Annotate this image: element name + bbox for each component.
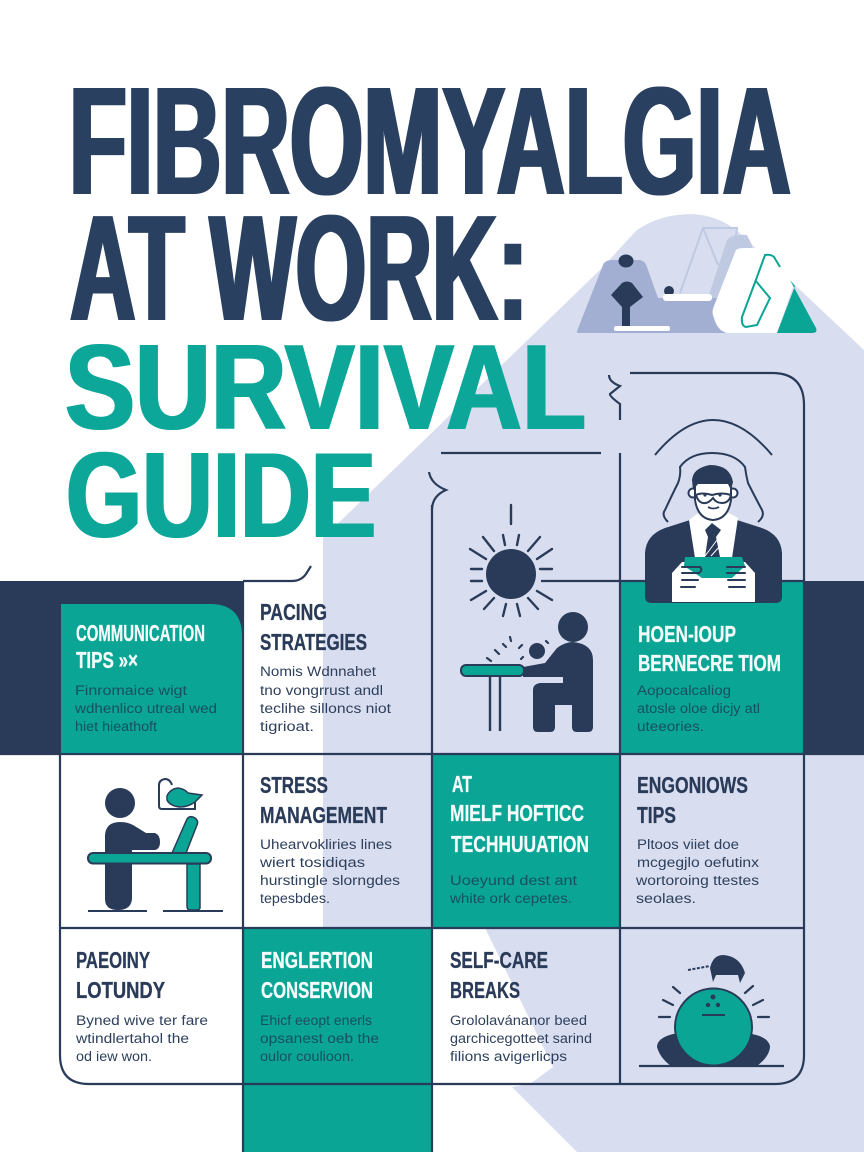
panel: communication tips: hiet hieathoft — [75, 719, 157, 735]
panel: energy conservation: opsanest oeb the — [260, 1031, 379, 1047]
panel: ergonomic tips: wortoroing ttestes — [635, 873, 759, 889]
icon: sun and person at desk — [461, 505, 593, 732]
navy band left — [0, 581, 243, 754]
panel: productivity — [75, 947, 208, 1065]
panel: pacing strategies: PACING — [260, 599, 327, 625]
panel: pacing strategies: STRATEGIES — [260, 629, 367, 655]
panel: communication tips — [61, 604, 242, 753]
grid lines — [0, 373, 864, 1152]
teal cell: homeroom — [621, 582, 804, 754]
panel: stress management: tepesbdes. — [260, 891, 330, 907]
panel: communication tips: TIPS »× — [76, 647, 138, 673]
panel: mindful techniques: white ork cepetes. — [449, 891, 572, 907]
panel: ergonomic tips: ENGONIOWS — [637, 772, 748, 798]
panel: self-care breaks: SELF-CARE — [450, 947, 548, 973]
panel: pacing strategies: tigrioat. — [260, 719, 314, 735]
lavender background shape — [323, 214, 864, 1152]
panel: energy conservation: CONSERVION — [261, 977, 373, 1003]
panel: homeroom text — [637, 621, 781, 735]
teal cell: energy conservation — [244, 928, 432, 1152]
panel: self-care breaks: garchicegotteet sarind — [450, 1031, 592, 1047]
panel: communication tips: wdhenlico utreal wed — [74, 701, 217, 717]
panel: self-care breaks: BREAKS — [450, 977, 520, 1003]
panel: stress management: STRESS — [260, 772, 328, 798]
panel: mindful techniques: TECHHUUATION — [451, 831, 589, 857]
teal cell: mindful techniques — [433, 755, 620, 927]
panel: mindful techniques: MIELF HOFTICC — [450, 800, 584, 826]
panel: ergonomic tips: Pltoos viiet doe — [637, 837, 739, 853]
panel: productivity: PAEOINY — [76, 947, 150, 973]
panel: productivity: wtindlertahol the — [75, 1031, 189, 1047]
icon: businessman with device — [645, 420, 782, 603]
panel: energy conservation: oulor coulioon. — [260, 1049, 354, 1065]
panel: communication tips: COMMUNICATION — [76, 620, 205, 646]
title — [65, 55, 791, 563]
panel: energy conservation: Ehicf eeopt enerls — [260, 1013, 372, 1029]
panel: mindful techniques — [449, 771, 589, 907]
panel: self-care breaks — [450, 947, 592, 1065]
panel: stress management: Uhearvokliries lines — [260, 837, 392, 853]
panel: pacing strategies: Nomis Wdnnahet — [260, 664, 376, 680]
panel: self-care breaks: filions avigerlicps — [450, 1049, 567, 1065]
panel: energy conservation: ENGLERTION — [261, 947, 373, 973]
panel: homeroom text: uteeories. — [637, 719, 704, 735]
panel: mindful techniques: AT — [452, 771, 472, 797]
panel: communication tips: Finromaice wigt — [75, 683, 187, 699]
panel: self-care breaks: Grololavánanor beed — [450, 1013, 587, 1029]
panel: productivity: od iew won. — [76, 1049, 152, 1065]
panel: homeroom text: atosle oloe dicjy atl — [637, 701, 760, 717]
panel: productivity: Byned wive ter fare — [76, 1013, 208, 1029]
panel: pacing strategies — [260, 599, 391, 735]
white cell: pacing base — [244, 582, 323, 754]
title: SURVIVAL — [65, 319, 586, 455]
panel: homeroom text: Aopocalcaliog — [637, 683, 731, 699]
panel: productivity: LOTUNDY — [76, 977, 165, 1003]
panel: stress management: MANAGEMENT — [260, 802, 387, 828]
panel: ergonomic tips: seolaes. — [636, 891, 696, 907]
panel: stress management: hurstingle slorngdes — [260, 873, 400, 889]
title: GUIDE — [66, 427, 376, 563]
panel: ergonomic tips — [635, 772, 759, 907]
icon: meditating figure — [639, 955, 784, 1066]
panel: pacing strategies: teclihe silloncs niot — [260, 701, 391, 717]
panel: stress management — [259, 772, 400, 907]
panel: homeroom text: HOEN-IOUP — [638, 621, 736, 647]
icon: mountain workspace illustration — [577, 228, 816, 333]
navy band right — [804, 581, 864, 754]
panel: ergonomic tips: TIPS — [637, 802, 676, 828]
panel: pacing strategies: tno vongrrust andl — [260, 683, 383, 699]
panel: homeroom text: BERNECRE TIOM — [638, 650, 781, 676]
panel: ergonomic tips: mcgegjlo oefutinx — [637, 855, 759, 871]
title: AT WORK: — [70, 183, 528, 352]
panel: energy conservation — [260, 947, 379, 1065]
panel: mindful techniques: Uoeyund dest ant — [450, 873, 577, 889]
icon: person at laptop — [88, 779, 223, 911]
panel: stress management: wiert tosidiqas — [259, 855, 365, 871]
